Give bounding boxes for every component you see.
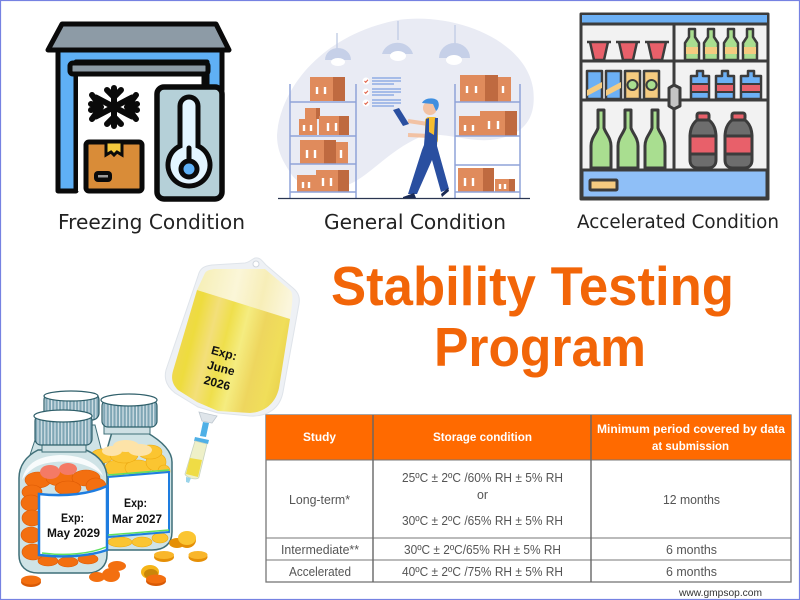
row: accelerated: 40ºC ± 2ºC /75% RH ± 5% RH [402, 565, 563, 579]
back bottle [30, 391, 104, 460]
illustration: general warehouse [277, 19, 534, 199]
jugs [691, 71, 761, 99]
worker [393, 98, 449, 198]
source credit: www.gmpsop.com [678, 588, 762, 599]
bag expiry label: June [206, 358, 237, 379]
title: Program [434, 316, 646, 378]
row: accelerated [289, 565, 717, 579]
checklist [362, 78, 401, 106]
icon: beverage cooler [581, 14, 768, 199]
row: accelerated: 6 months [666, 565, 717, 579]
table header row: Study [303, 430, 336, 444]
table header row [266, 415, 791, 460]
table: stability study conditions [266, 415, 791, 582]
table header row: Minimum period covered by data [597, 422, 785, 436]
row: intermediate: Intermediate** [281, 543, 359, 557]
row: long-term: 12 months [663, 493, 720, 507]
lamps [325, 21, 470, 66]
label: Freezing Condition: Freezing Condition [58, 210, 245, 234]
row: intermediate: 30ºC ± 2ºC/65% RH ± 5% RH [404, 543, 561, 557]
right bottle: Mar 2027: Mar 2027 [112, 514, 162, 526]
drip chamber [185, 412, 217, 483]
row: accelerated: Accelerated [289, 565, 351, 579]
table header row: Storage condition [433, 430, 532, 444]
boxed goods [587, 71, 659, 99]
right bottle: Mar 2027 [91, 394, 172, 550]
right bottle: Mar 2027: Exp: [124, 498, 147, 510]
label: General Condition: General Condition [324, 210, 506, 234]
bag expiry label: Exp: [210, 343, 238, 363]
green bottles [591, 110, 665, 168]
icon: snowflake [91, 88, 137, 126]
box arrows [303, 86, 505, 189]
small bottles [685, 29, 757, 60]
front bottle: May 2029: May 2029 [47, 528, 100, 540]
right shelf boxes [458, 75, 517, 192]
row: long-term: 30ºC ± 2ºC /65% RH ± 5% RH [402, 514, 563, 528]
front bottle: May 2029: Exp: [61, 513, 84, 525]
icon: cardboard box [86, 142, 142, 191]
door handle [669, 85, 680, 109]
cups [587, 42, 669, 60]
bag expiry label: 2026 [202, 373, 232, 393]
illustration: IV bag [165, 258, 299, 483]
row: intermediate [281, 543, 717, 557]
title: Stability Testing [331, 255, 734, 317]
row: long-term: or [477, 488, 488, 502]
loose pills [21, 531, 208, 587]
dark jars [690, 113, 752, 168]
row: long-term: Long-term* [289, 493, 350, 507]
left shelf boxes [297, 77, 349, 192]
icon: freezer warehouse [48, 24, 229, 199]
label: Accelerated Condition: Accelerated Condition [577, 212, 779, 233]
row: intermediate: 6 months [666, 543, 717, 557]
illustration: medicine bottles [19, 391, 208, 587]
row: long-term [289, 471, 720, 528]
title [331, 255, 734, 378]
front bottle: May 2029 [19, 410, 107, 573]
table header row: at submission [652, 439, 729, 453]
bag expiry label [202, 343, 238, 393]
icon: thermometer panel [157, 87, 222, 199]
row: long-term: 25ºC ± 2ºC /60% RH ± 5% RH [402, 471, 563, 485]
shelving frames [290, 84, 520, 198]
